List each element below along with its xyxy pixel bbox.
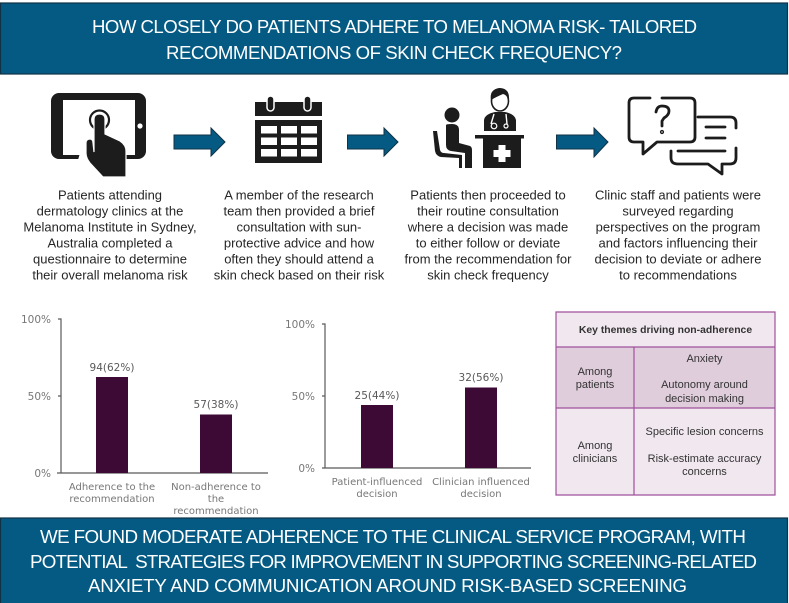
step 4 text: Clinic staff and patients were (595, 188, 761, 202)
table: key themes driving non-adherence: Anxiety (686, 353, 723, 365)
table: key themes driving non-adherence: patients (576, 379, 615, 391)
step 3 text (405, 188, 572, 282)
bar chart: adherence: recommendation (173, 506, 259, 517)
step 3 text: their routine consultation (417, 204, 559, 218)
table: key themes driving non-adherence: Among (578, 366, 612, 378)
conclusion banner: WE FOUND MODERATE ADHERENCE TO THE CLINICAL SERVICE PROGRAM, WITH (40, 526, 746, 547)
step 4 text (595, 188, 761, 282)
step 2 text: team then provided a brief (223, 204, 375, 218)
step 2 text: protective advice and how (224, 236, 375, 250)
step 3 text: from the recommendation for (405, 252, 572, 266)
icon: tablet with tapping hand (51, 93, 146, 177)
conclusion banner: POTENTIAL STRATEGIES FOR IMPROVEMENT IN SUPPORTING SCREENING-RELATED (30, 551, 757, 572)
bar chart: decision influence (285, 319, 531, 500)
step 2 text: often they should attend a (224, 252, 375, 266)
bar chart: decision influence: 100% (285, 319, 315, 331)
table: key themes driving non-adherence: Specific lesion concerns (645, 426, 764, 438)
table: key themes driving non-adherence: concerns (682, 466, 727, 478)
step 1 text: their overall melanoma risk (32, 268, 188, 282)
bar chart: decision influence: 50% (292, 391, 315, 403)
bar chart: decision influence: 0% (298, 463, 315, 475)
step 1 text: questionnaire to determine (33, 252, 187, 266)
title banner: HOW CLOSELY DO PATIENTS ADHERE TO MELANOMA RISK- TAILORED (92, 16, 697, 37)
bar chart: decision influence: decision (356, 489, 398, 500)
step 3 text: to either follow or deviate (416, 236, 560, 250)
step 3 text: where a decision was made (407, 220, 568, 234)
step 1 text: Australia completed a (47, 236, 173, 250)
step 2 text: consultation with sun- (236, 220, 362, 234)
bar chart: adherence: 50% (28, 391, 51, 403)
step 4 text: to recommendations (619, 268, 737, 282)
step 4 text: surveyed regarding (622, 204, 734, 218)
bar chart: decision influence: decision (460, 489, 502, 500)
table: key themes driving non-adherence: Among (578, 440, 612, 452)
conclusion banner: ANXIETY AND COMMUNICATION AROUND RISK-BASED SCREENING (88, 575, 687, 596)
step 4 text: and factors influencing their (599, 236, 758, 250)
step 3 text: skin check frequency (427, 268, 549, 282)
table: key themes driving non-adherence: Autonomy around (661, 379, 748, 391)
step 1 text: Patients attending (58, 188, 162, 202)
bar chart: decision influence: 32(56%) (459, 372, 503, 384)
bar chart: adherence: Non-adherence to (171, 482, 261, 493)
bar chart: adherence: 0% (34, 468, 51, 480)
step 2 text: A member of the research (224, 188, 374, 202)
title banner: RECOMMENDATIONS OF SKIN CHECK FREQUENCY? (166, 42, 622, 63)
bar chart: decision influence: 25(44%) (355, 390, 399, 402)
step 4 text: perspectives on the program (596, 220, 760, 234)
title banner (0, 3, 788, 74)
bar chart: adherence (21, 314, 268, 517)
step 2 text: skin check based on their risk (214, 268, 385, 282)
table: key themes driving non-adherence: decision making (665, 393, 744, 405)
icon: calendar (255, 96, 322, 163)
step 2 text (214, 188, 385, 282)
step 1 text: Melanoma Institute in Sydney, (23, 220, 197, 234)
icon: speech bubbles (629, 98, 736, 174)
arrow 2 (348, 128, 398, 156)
bar chart: decision influence: Patient-influenced (332, 477, 422, 488)
arrow 1 (174, 128, 225, 156)
step 3 text: Patients then proceeded to (410, 188, 566, 202)
table: key themes driving non-adherence: clinicians (573, 453, 618, 465)
icon: patient and doctor at desk (433, 88, 524, 168)
arrow 3 (556, 128, 608, 157)
bar chart: adherence: 57(38%) (194, 399, 238, 411)
table: key themes driving non-adherence (556, 312, 775, 495)
table: key themes driving non-adherence: Risk-estimate accuracy (648, 453, 762, 465)
bar chart: adherence: the (208, 494, 224, 505)
bar chart: adherence: Adherence to the (69, 482, 155, 493)
step 1 text (23, 188, 197, 282)
conclusion banner (0, 518, 788, 603)
bar chart: adherence: 100% (21, 314, 51, 326)
bar chart: adherence: recommendation (69, 494, 155, 505)
step 1 text: dermatology clinics at the (37, 204, 183, 218)
bar chart: decision influence: Clinician influenced (432, 477, 530, 488)
table: key themes driving non-adherence: Key themes driving non-adherence (579, 325, 752, 336)
bar chart: adherence: 94(62%) (90, 362, 134, 374)
step 4 text: decision to deviate or adhere (595, 252, 761, 266)
